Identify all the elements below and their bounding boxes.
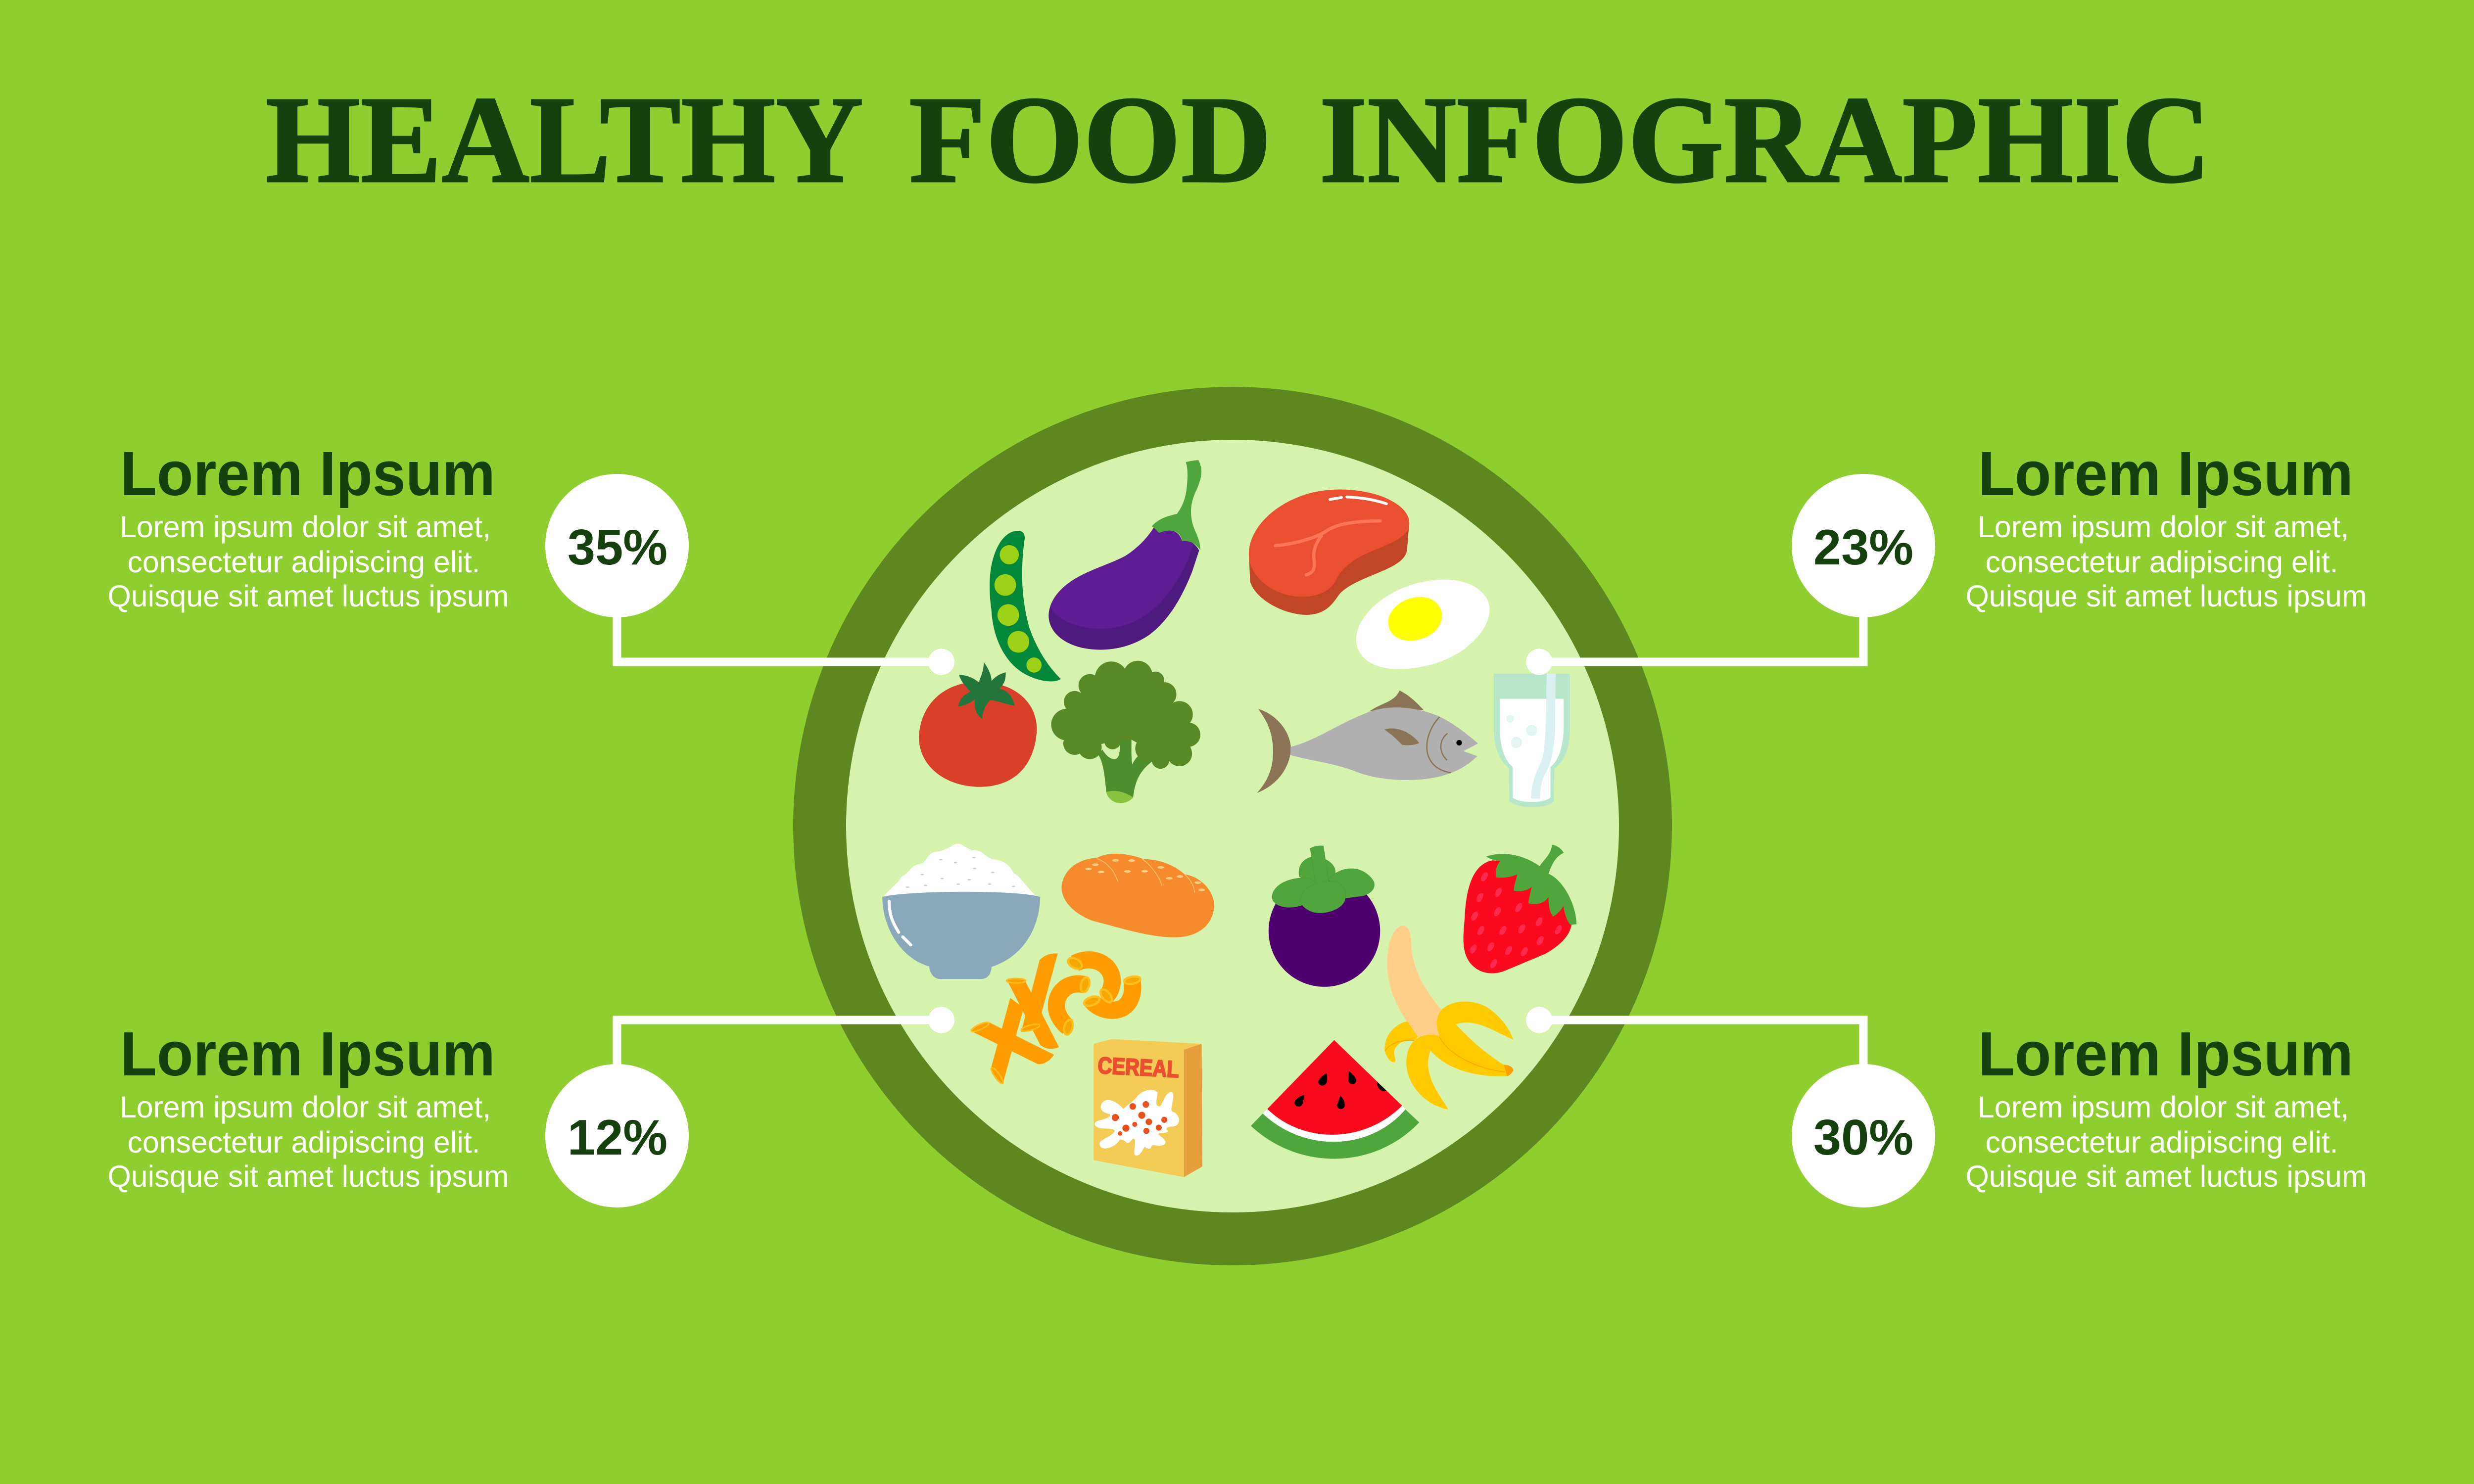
- text block: top left: Quisque sit amet luctus ipsum: [108, 579, 509, 613]
- badge: 35%: [545, 474, 689, 617]
- text block: bottom left: [108, 1019, 509, 1193]
- badge: 35%: 35%: [568, 520, 667, 575]
- icon: glass of milk: [1494, 674, 1570, 807]
- connector: 30%: [1526, 1007, 1863, 1068]
- text block: top right: Lorem Ipsum: [1978, 439, 2353, 509]
- icon: watermelon slice: [1251, 1040, 1419, 1159]
- plate surface: [846, 440, 1619, 1212]
- title: [266, 70, 2211, 209]
- icon: pea pod: [990, 531, 1061, 681]
- cereal box label: CEREAL: [1097, 1052, 1180, 1082]
- text block: bottom right: Quisque sit amet luctus ipsum: [1966, 1159, 2367, 1193]
- badge: 30%: 30%: [1813, 1110, 1913, 1165]
- title: FOOD: [909, 70, 1272, 209]
- text block: bottom right: Lorem Ipsum: [1978, 1019, 2353, 1089]
- icon: rice bowl: [882, 844, 1040, 979]
- text block: bottom right: consectetur adipiscing elit.: [1985, 1125, 2338, 1159]
- icon: banana: [1384, 926, 1513, 1110]
- icon: cereal box: [1094, 1039, 1202, 1177]
- icon: fried egg: [1356, 580, 1489, 669]
- icon: fish: [1257, 691, 1478, 793]
- plate rim: [793, 387, 1672, 1265]
- badge: 12%: [545, 1064, 689, 1207]
- text block: top right: [1966, 439, 2367, 613]
- plate: [793, 387, 1672, 1265]
- text block: top right: Lorem ipsum dolor sit amet,: [1978, 510, 2349, 544]
- text block: top left: Lorem Ipsum: [120, 439, 495, 509]
- text block: top left: consectetur adipiscing elit.: [127, 545, 480, 579]
- title: INFOGRAPHIC: [1319, 70, 2211, 209]
- text block: bottom left: Quisque sit amet luctus ipsum: [108, 1159, 509, 1193]
- title: HEALTHY: [266, 70, 863, 209]
- connector: 12%: [617, 1007, 954, 1068]
- connector: 35%: [617, 613, 954, 675]
- text block: bottom left: Lorem ipsum dolor sit amet,: [120, 1090, 491, 1124]
- text block: bottom left: consectetur adipiscing elit.: [127, 1125, 480, 1159]
- text block: top right: Quisque sit amet luctus ipsum: [1966, 579, 2367, 613]
- icon: bread: [1061, 854, 1214, 937]
- icon: steak: [1249, 489, 1409, 615]
- icon: mangosteen: [1269, 846, 1380, 987]
- icon: broccoli: [1051, 661, 1200, 803]
- badge: 30%: [1792, 1064, 1935, 1207]
- badge: 23%: [1792, 474, 1935, 617]
- icon: pasta: [970, 953, 1141, 1085]
- icon: tomato: [919, 662, 1037, 787]
- text block: bottom left: Lorem Ipsum: [120, 1019, 495, 1089]
- text block: bottom right: Lorem ipsum dolor sit amet,: [1978, 1090, 2349, 1124]
- text block: top right: consectetur adipiscing elit.: [1985, 545, 2338, 579]
- badge: 23%: 23%: [1813, 520, 1913, 575]
- text block: top left: [108, 439, 509, 613]
- badge: 12%: 12%: [568, 1110, 667, 1165]
- text block: top left: Lorem ipsum dolor sit amet,: [120, 510, 491, 544]
- icon: eggplant: [1048, 460, 1201, 649]
- icon: strawberry: [1464, 845, 1576, 974]
- connector: 23%: [1526, 613, 1863, 675]
- text block: bottom right: [1966, 1019, 2367, 1193]
